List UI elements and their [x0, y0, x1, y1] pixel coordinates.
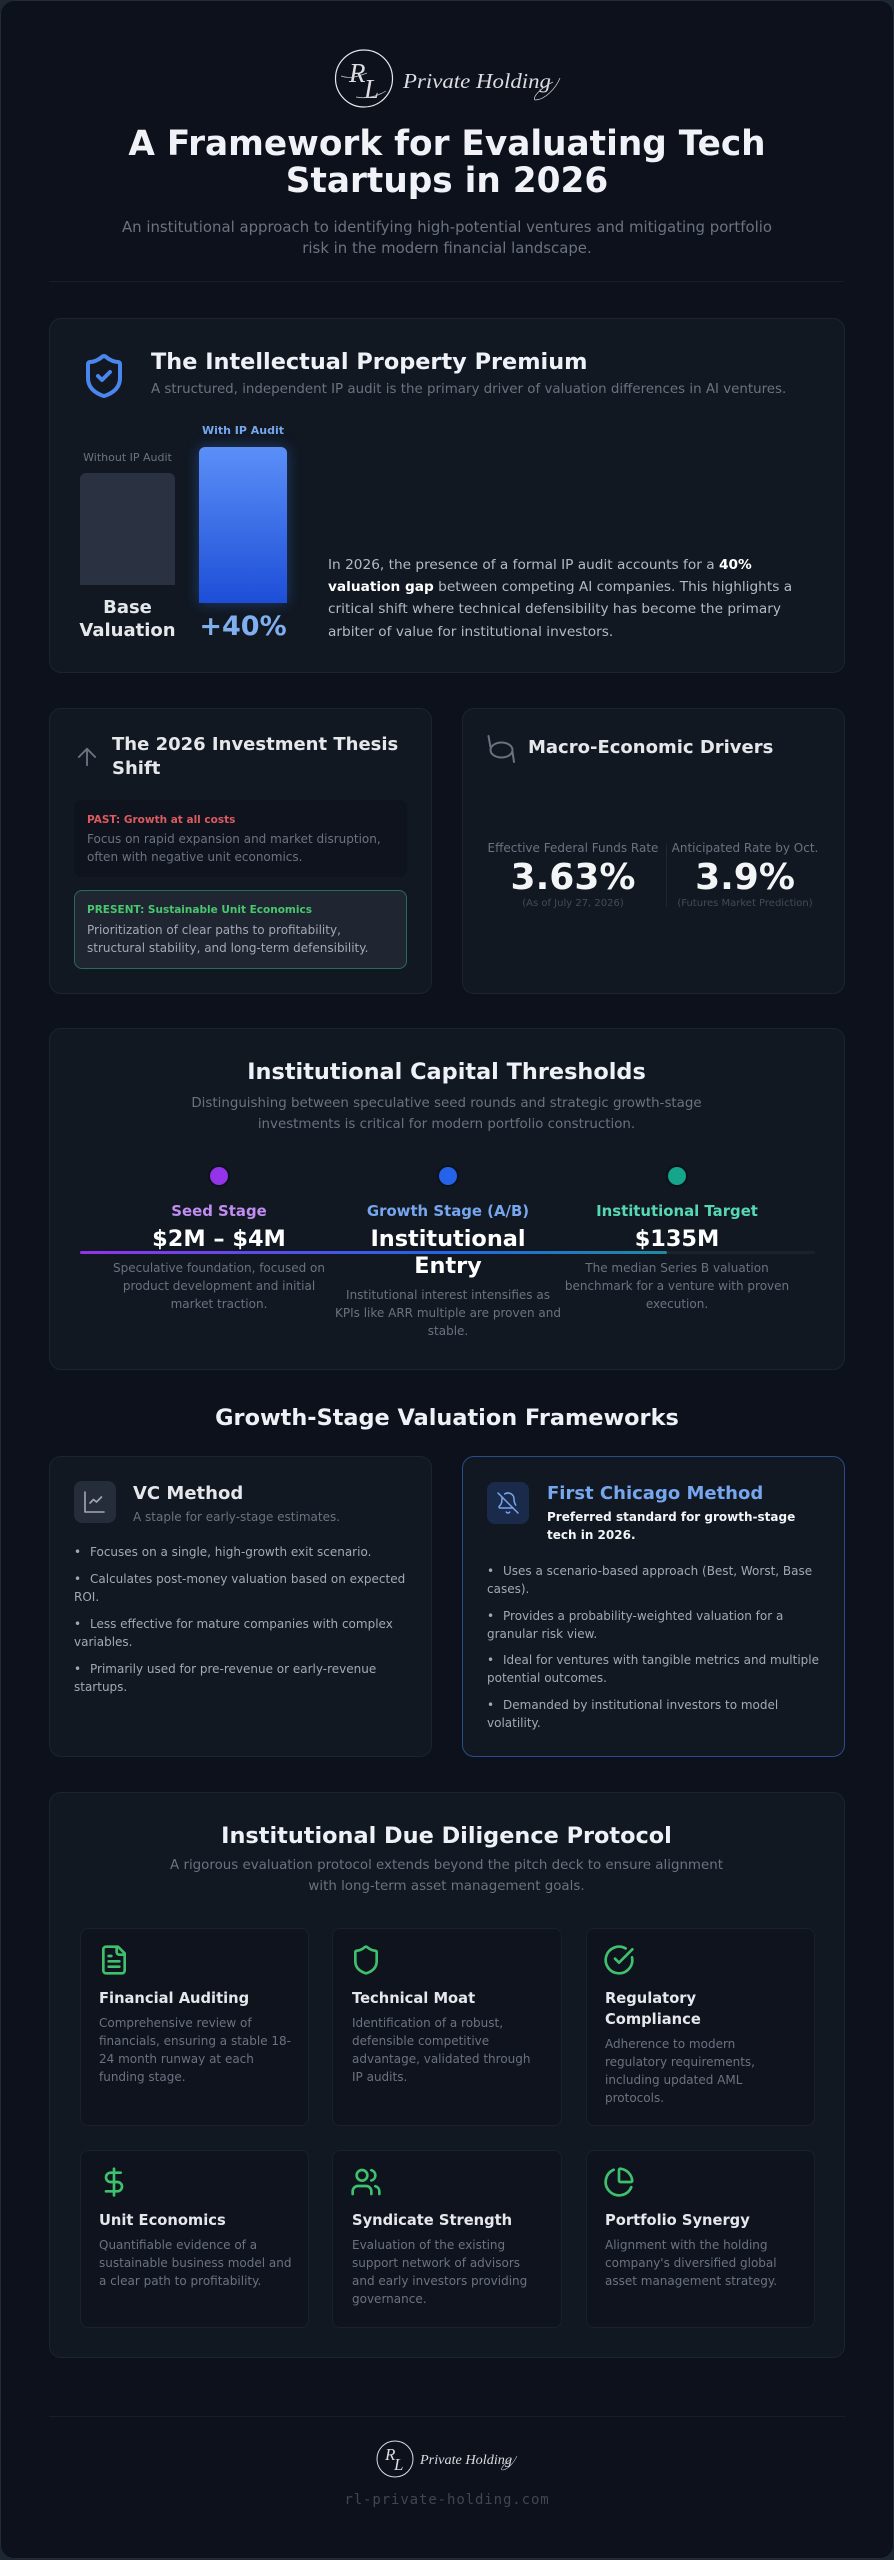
- icon: pie chart: [604, 2167, 634, 2197]
- card: financial auditing: financials, ensuring a stable 18-: [99, 2034, 291, 2048]
- card: syndicate strength: Syndicate Strength: [352, 2212, 512, 2229]
- bar: without IP audit: [79, 451, 176, 641]
- card: regulatory compliance: regulatory requirements,: [605, 2055, 755, 2069]
- tagline: tech in 2026.: [547, 1528, 636, 1542]
- card: regulatory compliance: including updated AML: [605, 2073, 742, 2087]
- description: [191, 1096, 702, 1132]
- timeline bar: [80, 1251, 815, 1254]
- present box: [74, 890, 407, 969]
- timeline stage: growth: Entry: [414, 1253, 482, 1279]
- explanatory paragraph: arbiter of value for institutional investors.: [328, 624, 613, 640]
- card: syndicate strength: Evaluation of the existing: [352, 2238, 505, 2252]
- description: A structured, independent IP audit is the primary driver of valuation differences in AI ventures.: [151, 382, 786, 397]
- card: syndicate strength: and early investors providing: [352, 2274, 527, 2288]
- card: regulatory compliance: Compliance: [605, 2011, 701, 2028]
- icon: shield: [354, 1945, 378, 1975]
- past text: often with negative unit economics.: [87, 850, 302, 864]
- bullet list: [487, 1564, 819, 1730]
- section heading: valuation frameworks: Growth-Stage Valuation Frameworks: [215, 1405, 679, 1431]
- card: regulatory compliance: [586, 1928, 815, 2126]
- past text: [87, 832, 381, 864]
- explanatory paragraph: valuation gap between competing AI companies. This highlights a: [328, 579, 792, 595]
- card: unit economics: Unit Economics: [99, 2212, 226, 2229]
- bullet list: •: [74, 1617, 81, 1631]
- timeline stage: seed: Seed Stage: [171, 1202, 267, 1220]
- panel: macro-economic drivers: [462, 708, 845, 994]
- timeline stage: growth: Growth Stage (A/B): [367, 1202, 529, 1220]
- explanatory paragraph: [328, 557, 792, 640]
- panel: VC method: [49, 1456, 432, 1757]
- stat: federal funds rate: (As of July 27, 2026): [522, 898, 624, 909]
- timeline stage: institutional target: The median Series B valuation: [585, 1261, 769, 1275]
- bar: without IP audit: Without IP Audit: [83, 451, 172, 464]
- card: unit economics: [80, 2150, 309, 2328]
- title: [128, 124, 766, 200]
- heading: The Intellectual Property Premium: [151, 349, 588, 375]
- timeline stage: seed: [113, 1167, 325, 1311]
- panel: due diligence protocol: [49, 1792, 845, 2358]
- bullet list: •: [487, 1653, 494, 1667]
- past box: [74, 800, 407, 877]
- bullet list: Calculates post-money valuation based on expected: [90, 1572, 405, 1586]
- bar: with IP audit: With IP Audit: [202, 424, 284, 437]
- panel: First Chicago method: [462, 1456, 845, 1757]
- bullet list: potential outcomes.: [487, 1671, 607, 1685]
- heading: The 2026 Investment Thesis: [112, 734, 398, 755]
- description: investments is critical for modern portfolio construction.: [258, 1117, 635, 1132]
- timeline stage: seed: $2M – $4M: [152, 1226, 286, 1252]
- heading: Shift: [112, 758, 160, 779]
- icon: file text: [102, 1945, 126, 1975]
- card: syndicate strength: [332, 2150, 562, 2328]
- footer URL: rl-private-holding.com: [344, 2492, 550, 2508]
- tagline: Preferred standard for growth-stage: [547, 1510, 795, 1524]
- heading: First Chicago Method: [547, 1483, 763, 1504]
- dot: target: [668, 1167, 686, 1185]
- card: technical moat: Technical Moat: [352, 1990, 475, 2007]
- timeline stage: institutional target: benchmark for a venture with proven: [565, 1279, 789, 1293]
- footer logo: L: [393, 2455, 403, 2474]
- card: financial auditing: Financial Auditing: [99, 1990, 249, 2007]
- heading: [112, 734, 398, 779]
- icon: shield check: [86, 354, 122, 398]
- header logo: [334, 49, 560, 108]
- icon: arrow up: [78, 748, 96, 766]
- stat: anticipated rate: 3.9%: [695, 857, 795, 898]
- panel: institutional capital thresholds: [49, 1028, 845, 1370]
- heading: Macro-Economic Drivers: [528, 737, 773, 758]
- footer logo: Private Holding: [419, 2453, 512, 2468]
- bullet list: Primarily used for pre-revenue or early-revenue: [90, 1662, 376, 1676]
- icon: cycle arrows: [488, 735, 515, 763]
- bar: without IP audit: Valuation: [79, 620, 176, 641]
- title: Startups in 2026: [286, 160, 608, 200]
- card: syndicate strength: governance.: [352, 2292, 427, 2306]
- past text: Focus on rapid expansion and market disruption,: [87, 832, 381, 846]
- header logo: L: [363, 74, 379, 104]
- present text: Prioritization of clear paths to profitability,: [87, 923, 341, 937]
- card: regulatory compliance: protocols.: [605, 2091, 664, 2105]
- bar: with IP audit: [191, 424, 295, 642]
- bullet list: startups.: [74, 1680, 127, 1694]
- tagline: A staple for early-stage estimates.: [133, 1510, 340, 1524]
- present text: structural stability, and long-term defensibility.: [87, 941, 368, 955]
- card: unit economics: a clear path to profitability.: [99, 2274, 261, 2288]
- timeline stage: seed: product development and initial: [123, 1279, 315, 1293]
- heading: Institutional Capital Thresholds: [247, 1059, 646, 1085]
- icon: circle check: [604, 1945, 634, 1975]
- description: Distinguishing between speculative seed rounds and strategic growth-stage: [191, 1096, 702, 1111]
- panel: investment thesis shift: [49, 708, 432, 994]
- card: unit economics: sustainable business model and: [99, 2256, 291, 2270]
- card: financial auditing: [80, 1928, 309, 2126]
- bullet list: Ideal for ventures with tangible metrics and multiple: [503, 1653, 819, 1667]
- heading: VC Method: [133, 1483, 243, 1504]
- card: portfolio synergy: Alignment with the holding: [605, 2238, 768, 2252]
- timeline stage: seed: market traction.: [171, 1297, 267, 1311]
- icon: dollar sign: [104, 2167, 124, 2197]
- timeline stage: growth: Institutional: [370, 1226, 526, 1252]
- card: financial auditing: Comprehensive review of: [99, 2016, 252, 2030]
- stat: anticipated rate: (Futures Market Prediction): [677, 898, 813, 909]
- card: portfolio synergy: [586, 2150, 815, 2328]
- card: unit economics: Quantifiable evidence of a: [99, 2238, 257, 2252]
- stat: anticipated rate: Anticipated Rate by Oct.: [672, 841, 818, 855]
- present text: [87, 923, 368, 955]
- bar: with IP audit: +40%: [199, 611, 287, 642]
- bullet list: Focuses on a single, high-growth exit scenario.: [90, 1545, 371, 1559]
- card: technical moat: defensible competitive: [352, 2034, 489, 2048]
- footer logo: R: [384, 2445, 396, 2464]
- bullet list: granular risk view.: [487, 1627, 597, 1641]
- timeline stage: growth: Institutional interest intensifies as: [346, 1288, 550, 1302]
- present label: PRESENT: Sustainable Unit Economics: [87, 904, 312, 916]
- bullet list: Demanded by institutional investors to model: [503, 1698, 778, 1712]
- timeline stage: seed: Speculative foundation, focused on: [113, 1261, 325, 1275]
- bullet list: •: [74, 1662, 81, 1676]
- timeline stage: growth: [335, 1167, 561, 1338]
- card: technical moat: [332, 1928, 562, 2126]
- title: A Framework for Evaluating Tech: [128, 124, 766, 164]
- stat: anticipated rate: [672, 841, 818, 909]
- card: technical moat: advantage, validated through: [352, 2052, 530, 2066]
- timeline stage: institutional target: Institutional Target: [596, 1202, 758, 1220]
- explanatory paragraph: In 2026, the presence of a formal IP audit accounts for a 40%: [328, 557, 752, 573]
- header logo: R: [348, 58, 366, 88]
- stat: federal funds rate: 3.63%: [511, 857, 635, 898]
- bullet list: Less effective for mature companies with complex: [90, 1617, 393, 1631]
- subtitle: [122, 218, 772, 257]
- header logo: Private Holding: [402, 69, 551, 93]
- bullet list: cases).: [487, 1582, 529, 1596]
- bullet list: •: [487, 1609, 494, 1623]
- timeline stage: institutional target: execution.: [646, 1297, 708, 1311]
- bullet list: •: [487, 1564, 494, 1578]
- panel: intellectual property premium: [49, 318, 845, 673]
- timeline stage: institutional target: $135M: [635, 1226, 719, 1252]
- tagline: [547, 1510, 795, 1542]
- card: technical moat: IP audits.: [352, 2070, 407, 2084]
- bullet list: Provides a probability-weighted valuation for a: [503, 1609, 783, 1623]
- icon: line chart: [74, 1481, 116, 1523]
- subtitle: risk in the modern financial landscape.: [302, 239, 592, 257]
- bullet list: Uses a scenario-based approach (Best, Worst, Base: [503, 1564, 812, 1578]
- bullet list: variables.: [74, 1635, 132, 1649]
- bullet list: •: [74, 1545, 81, 1559]
- card: portfolio synergy: Portfolio Synergy: [605, 2212, 750, 2229]
- footer logo: [376, 2440, 518, 2478]
- stat: federal funds rate: Effective Federal Funds Rate: [488, 841, 658, 855]
- card: portfolio synergy: company's diversified global: [605, 2256, 777, 2270]
- bullet list: volatility.: [487, 1716, 541, 1730]
- dot: seed: [210, 1167, 228, 1185]
- bullet list: [74, 1545, 405, 1694]
- bullet list: •: [74, 1572, 81, 1586]
- card: portfolio synergy: asset management strategy.: [605, 2274, 777, 2288]
- card: regulatory compliance: Regulatory: [605, 1990, 696, 2007]
- card: technical moat: Identification of a robust,: [352, 2016, 503, 2030]
- card: syndicate strength: support network of advisors: [352, 2256, 520, 2270]
- icon: bell off: [487, 1482, 529, 1524]
- card: regulatory compliance: Adherence to modern: [605, 2037, 735, 2051]
- description: A rigorous evaluation protocol extends beyond the pitch deck to ensure alignment: [170, 1858, 723, 1873]
- icon: users: [351, 2168, 381, 2196]
- card: financial auditing: funding stage.: [99, 2070, 186, 2084]
- timeline stage: growth: stable.: [428, 1324, 468, 1338]
- timeline stage: institutional target: [565, 1167, 789, 1311]
- description: with long-term asset management goals.: [308, 1879, 585, 1894]
- timeline stage: growth: KPIs like ARR multiple are proven and: [335, 1306, 561, 1320]
- heading: Institutional Due Diligence Protocol: [221, 1823, 672, 1849]
- explanatory paragraph: critical shift where technical defensibility has become the primary: [328, 601, 781, 617]
- description: [170, 1858, 723, 1894]
- card: financial auditing: 24 month runway at each: [99, 2052, 254, 2066]
- subtitle: An institutional approach to identifying high-potential ventures and mitigating portfolio: [122, 218, 772, 236]
- bullet list: ROI.: [74, 1590, 99, 1604]
- stat: federal funds rate: [488, 841, 658, 909]
- bullet list: •: [487, 1698, 494, 1712]
- dot: growth: [439, 1167, 457, 1185]
- past label: PAST: Growth at all costs: [87, 814, 235, 826]
- bar: without IP audit: Base: [103, 597, 152, 618]
